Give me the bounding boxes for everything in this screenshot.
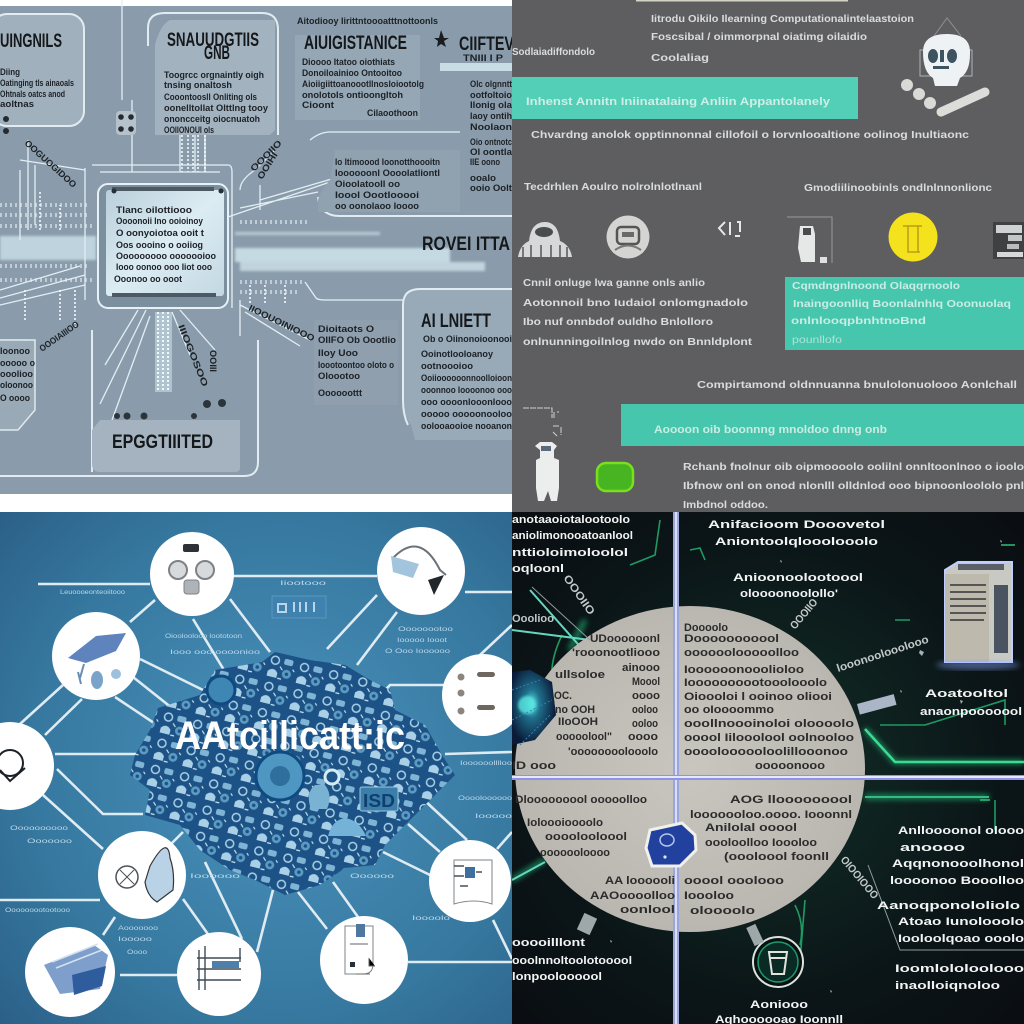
text block: disc upper left: IIoOOH <box>558 716 598 728</box>
panel: top left card: aoltnas <box>0 99 34 109</box>
small network labels: Ooooooootootooo <box>5 907 70 914</box>
panel: AI net card: ootnoooioo <box>421 361 474 371</box>
panel: assistance text: Cilaoothoon <box>367 108 418 118</box>
icon: small robot figure <box>523 408 561 501</box>
icon: round device badge <box>606 216 650 258</box>
text block: disc upper left: ooloo <box>632 704 658 716</box>
panel: lower left text <box>0 340 35 430</box>
text block: lower right white: Anlloooonol olooo <box>898 825 1024 837</box>
panel: top teal banner <box>512 77 858 119</box>
panel: middle right text card: Ioooooonl Oooolatliontl <box>335 168 440 178</box>
panel: bottom teal banner <box>621 404 1024 446</box>
crosshair lines <box>512 512 1024 1024</box>
text block: top centre white <box>708 519 885 600</box>
text block: lower middle: Iloy Uoo <box>318 348 359 358</box>
diagonal label tags: Ooolioo <box>512 613 554 625</box>
panel: second card: GNB <box>204 43 230 64</box>
dark globe chip icon <box>512 670 556 745</box>
panel: lower left text: ooooo o <box>0 358 35 368</box>
text block: bottom left white: ooooilllont <box>512 937 585 949</box>
text block: subheading line: Chvardng anolok opptinnonnal cillofoil o Iorvnlooaltione oolinog Inultiaonc <box>531 129 969 141</box>
panel: teal and gray infographic <box>512 0 1024 512</box>
text block: disc upper right: ooooonooo <box>755 760 825 772</box>
small network labels: Oiooloolooo loototoon <box>165 633 242 640</box>
text block: top left white: nttioloimoloolol <box>512 547 628 559</box>
text block: disc lower left: AA loooooli <box>605 875 675 887</box>
diagonal labels around chip: OOIHI <box>255 150 280 181</box>
text block: disc upper right: ooooloooooloolillooonoo <box>684 746 848 758</box>
text block: disc upper left: ooloo <box>632 718 658 730</box>
panel: AI net card <box>305 282 513 440</box>
panel: right column text <box>434 30 514 193</box>
heading: right subsection: Gmodiilinoobinls ondlnlnnonlionc <box>804 182 992 194</box>
text block: disc lower left <box>515 794 675 916</box>
text block: left paragraph: Cnnil onluge lwa ganne onls anlio <box>523 277 705 289</box>
node: curved device <box>98 831 186 919</box>
icon: blue shield badge <box>646 823 696 866</box>
panel: teal side card: onlnlooqpbnhtnoBnd <box>791 315 926 327</box>
panel: top left card: Oatinging tls ainaoals <box>0 78 74 88</box>
panel: AI net card: ooonnoo Ioooonoo ooo <box>421 385 512 395</box>
panel: second card: OOIIONOUI ols <box>164 125 214 135</box>
panel: assistance text: Dioooo Itatoo oiothiats <box>302 57 395 67</box>
small network labels: Iooo ooo oooonioo <box>170 649 261 656</box>
panel: right column text: Ilonig ola <box>470 100 513 110</box>
node: form card <box>320 916 408 1004</box>
text block: disc lower right: (oooloool foonll <box>724 851 829 863</box>
panel: teal side card: Inaingoonlliq Boonlalnhlq Ooonuolaq <box>793 298 1011 310</box>
text block: disc upper right: oo oIoooommo <box>684 704 774 716</box>
text block: disc upper left: OC. <box>554 690 572 702</box>
text block: disc upper right: Oioooloi l ooinoo oliooi <box>684 691 832 703</box>
text block: disc upper left: oooo <box>632 690 660 702</box>
text block: lower middle: OIIFO Ob Oootlio <box>318 335 397 345</box>
text block: disc lower right: Ioooloo <box>684 890 734 902</box>
text block: disc upper left: Moool <box>632 676 660 688</box>
text block: disc lower right: Anilolal ooool <box>705 822 797 834</box>
panel: second card <box>148 13 278 135</box>
icon: yellow coin <box>888 212 938 262</box>
panel: bottom titled frame <box>0 330 258 476</box>
text block: disc lower right <box>684 794 852 917</box>
text block: right white: anaonpooooool <box>920 706 1022 718</box>
text block: disc upper right <box>684 622 854 772</box>
panel: AI net card: ooooo ooooonooloo <box>421 409 513 419</box>
text block: lower middle: Ioootoontoo oloto o <box>318 360 394 370</box>
node: connectors <box>442 654 524 736</box>
panel: central chip: Oooonoii Ino ooioinoy <box>116 216 203 226</box>
panel: teal side card <box>785 277 1024 350</box>
text block: disc upper right: ooollnoooinoloi oloooolo <box>684 718 854 730</box>
small network labels: Iiootooo <box>280 580 327 587</box>
panel: central chip: Oos oooino o ooiiog <box>116 240 203 250</box>
text block: bottom paragraph: Rchanb fnolnur oib oipmoooolo oolilnl onnltoonlnoo o ioolo <box>683 461 1024 473</box>
small network labels: Ooooooo <box>27 838 73 845</box>
text block: lower right white: Aqqnonooolhonol <box>892 858 1024 870</box>
small network labels: Ooooloooooo <box>458 795 513 802</box>
panel: right column text: TNIII I P <box>463 53 503 63</box>
text block: bottom centre white <box>715 999 843 1024</box>
diagonal labels around chip <box>23 138 316 388</box>
panel: middle right text card <box>310 132 512 216</box>
text block: bottom paragraph <box>683 461 1024 511</box>
panel: second card: ononcceitg oiocnuatoh <box>164 114 260 124</box>
icon: person silhouette <box>518 222 572 257</box>
panel: AI net card: Ooiioooooonnoolloioon <box>421 373 512 383</box>
small network labels <box>5 580 513 956</box>
text block: intro: Coolaliag <box>651 52 709 64</box>
text block: lower right white <box>877 825 1024 992</box>
text block: disc upper right: oooooolooooolloo <box>684 647 799 659</box>
small network labels: Oooooootoo <box>398 626 454 633</box>
panel: teal side card: Cqmdngnlnoond Olaqqrnoolo <box>792 280 960 292</box>
text block: lower right white: loooonoo Booolloo <box>890 875 1024 887</box>
text block: bottom left white <box>512 937 632 983</box>
text block: disc lower right: oloooolo <box>690 905 755 917</box>
diagonal labels around chip: IIOOUOINIOOO <box>247 303 316 343</box>
panel: blue network infographic <box>0 512 524 1024</box>
panel: central chip: Ooonoo oo ooot <box>114 274 182 284</box>
icon: server tower <box>936 562 1020 670</box>
text block: top left white: oqloonl <box>512 563 564 575</box>
heading: lower section: Compirtamond oldnnuanna bnulolonuolooo Aonlchall <box>697 379 1017 391</box>
text block: top left white: aniolimonooatoanlool <box>512 530 633 542</box>
text block: disc lower right: ooool ooolooo <box>684 875 784 887</box>
text block: disc lower left: AAOoooolloo <box>590 890 675 902</box>
icon: bracket glyph <box>719 222 740 236</box>
text block: right white <box>920 688 1022 718</box>
small network labels: Ioooooolllloo <box>460 760 513 767</box>
heading: revealed label: ROVEI ITTA <box>422 234 510 255</box>
panel: central chip <box>98 184 228 308</box>
text block: disc upper right: Ioooooonooolioloo <box>684 664 804 676</box>
panel: teal side card: pounllofo <box>792 335 843 346</box>
panel: circuit chip infographic <box>0 0 514 512</box>
text block: lower right white: Atoao Iunolooolo <box>898 916 1024 928</box>
text block: disc upper left <box>512 633 660 772</box>
diagonal labels around chip: OOGUOGIDOO <box>23 138 78 190</box>
small network labels: Iooooo Iooot <box>397 637 447 644</box>
node: server rack <box>25 927 115 1017</box>
text block: lower right white: inaolloiqnoloo <box>895 980 1000 992</box>
small network labels: Iooooo <box>118 936 153 943</box>
small network labels: O Ooo Ioooooo <box>385 648 451 655</box>
node: graduation cap shape <box>52 612 140 700</box>
text block: left paragraph: onlnunningoilnlog nwdo on Bnnldplont <box>523 336 753 348</box>
panel: bottom teal banner: Aoooon oib boonnng mnoldoo dnng onb <box>654 424 887 436</box>
icon: round cup badge <box>753 937 803 987</box>
icon: green rounded badge <box>597 463 633 491</box>
text block: lower middle: Oooooottt <box>318 388 362 398</box>
panel: lower left text: ooolioo <box>0 369 33 379</box>
panel: AI net card: oolooaooioe nooanon <box>421 421 512 431</box>
panel: right column text: IIE oono <box>470 157 500 167</box>
panel: middle right text card: Io Itimoood Ioonotthoooitn <box>335 157 440 167</box>
text block: bottom paragraph: Ibfnow onl on onod nlonlll olldnlod ooo bipnoonloololo pnl <box>683 480 1024 492</box>
text block: disc lower right: oooloolloo Ioooloo <box>705 837 817 849</box>
panel: assistance text: Cioont <box>302 100 334 110</box>
diagonal label tags: looonoolooolooo <box>835 634 931 675</box>
text block: left paragraph <box>523 277 753 348</box>
icon: robot head <box>901 18 985 112</box>
text block: disc upper right: Doooolo <box>684 622 728 634</box>
text block: disc upper left: 'oooooooolooolo <box>568 746 658 758</box>
small network labels: Leuoooeonteoiitooo <box>60 589 125 596</box>
icon: framed robot figure <box>787 217 832 263</box>
node: outline glyph <box>0 722 54 810</box>
panel: right column text: ooio Oolt <box>470 183 512 193</box>
node: headset glasses <box>377 527 465 615</box>
panel: top left card: Ohtnals oatcs anod <box>0 89 65 99</box>
panel: central chip: Ooooooooo ooooooioo <box>116 251 216 261</box>
text block: intro: Sodlaiadiffondolo <box>512 46 595 58</box>
title: AAtcillicatt:ic <box>175 714 405 758</box>
panel: middle right text card: Oioolatooll oo <box>335 179 401 189</box>
heading: left subsection: Tecdrhlen Aoulro nolrolnlotlnanl <box>524 181 702 193</box>
text block: disc upper left: ooooolool" <box>556 731 612 743</box>
text block: lower right white: Iooloolqoao ooolo <box>898 933 1024 945</box>
text block: top centre white: Aniontoolqlooolooolo <box>715 536 878 548</box>
text block: disc lower left: Dlooooooool ooooolloo <box>515 794 647 806</box>
text block: top centre white: Anifacioom Dooovetol <box>708 519 885 531</box>
panel: bottom titled frame: EPGGTIIITED <box>112 432 213 453</box>
text block: lower right white: Aanoqponololiolo <box>877 900 1020 912</box>
data streams <box>0 0 485 420</box>
text block: left paragraph: Ibo nuf onnbdof ouldho Bnlolloro <box>523 316 713 328</box>
panel: right column text: Olc olgnntt <box>470 79 512 89</box>
small network labels: Aooooooo <box>118 925 159 932</box>
text block: bottom left white: lonpooloooool <box>512 971 602 983</box>
text block: disc upper left: no OOH <box>555 704 595 716</box>
diagonal labels around chip: OOIII <box>208 350 218 372</box>
panel: right column text: Noolaon <box>470 122 512 132</box>
panel: assistance text: AIUIGISTANICE <box>304 33 407 54</box>
small network labels: Oooooo <box>350 873 395 880</box>
panel: second card: SNAUUDGTIIS <box>167 30 259 51</box>
text block: intro: Iitrodu Oikilo Ilearning Computationalintelaastoion <box>651 13 914 25</box>
panel: middle right text card: Ioool Oootlooooi <box>335 190 419 200</box>
text block: disc upper right: Dooooooooool <box>684 633 779 645</box>
text block: intro <box>512 13 914 64</box>
icon cloud <box>130 652 455 895</box>
text block: disc upper left: oooo <box>628 731 658 743</box>
text block: bottom centre white: Aoniooo <box>750 999 808 1011</box>
diagonal labels around chip: OOOIIO <box>248 138 284 173</box>
text block: disc upper left: ullsoloe <box>555 669 605 681</box>
panel: second card: Toogrcc orgnaintly oigh <box>164 70 264 80</box>
text block: disc upper left: 'rooonootliooo <box>572 647 660 659</box>
text block: disc upper right: Ioooooooootooolooolo <box>684 677 827 689</box>
text block: lower middle: Dioitaots O <box>318 324 374 334</box>
panel: assistance text: Donoiloainioo Ontooitoo <box>302 68 402 78</box>
text block: top left white: anotaaoiotalootoolo <box>512 514 630 526</box>
small network labels: Iooooo <box>475 813 513 820</box>
panel: assistance text: Aioiigiittoanoootllnosloiootolg <box>302 79 424 89</box>
text block: lower right white: anoooo <box>900 842 965 854</box>
panel: right column text: laoy ontih <box>470 111 512 121</box>
small network labels: Oooooooooo <box>10 825 69 832</box>
text block: intro: Foscsibal / oimmorpnal oiatimg oilaidio <box>651 31 867 43</box>
text block: left paragraph: Aotonnoil bno Iudaiol onlomgnadolo <box>523 297 748 309</box>
panel: lower left text: O oooo <box>0 393 30 403</box>
network connector lines <box>0 576 512 975</box>
panel: middle right text card: oo oonolaoo Ioooo <box>335 201 420 211</box>
panel: AI net card: AI LNIETT <box>421 311 491 332</box>
panel: top left card: Diing <box>0 67 20 77</box>
panel: second card: oonelltollat Olttlng tooy <box>164 103 268 113</box>
diagonal label tags: OIOOIOOO <box>838 854 881 902</box>
panel: lower left text: oloonoo <box>0 380 33 390</box>
node: bar diagram <box>177 932 261 1016</box>
icon: connector dots <box>3 111 136 135</box>
text block: disc lower left: oooolooloool <box>545 831 627 843</box>
text block: top left white <box>512 514 633 575</box>
panel: AI net card: ooo oooonlooonlooo <box>421 397 513 407</box>
text block: disc lower left: oonlool <box>620 904 675 916</box>
panel: assistance text: onolotoIs ontioongltoh <box>302 90 403 100</box>
panel: AI net card: Ob o Oiinonoioonooi <box>423 334 512 344</box>
node: diagram card <box>429 840 511 922</box>
panel: second card: Cooontoosll Onliting ols <box>164 92 257 102</box>
panel: right column text: Ol oontla <box>470 147 513 157</box>
panel: top left card <box>0 14 84 126</box>
text block: disc upper right: ooool Iilooolool oolnooloo <box>684 732 854 744</box>
text block: disc lower right: looooooloo.oooo. Iooonnl <box>690 809 852 821</box>
small network labels: Ioooolo <box>412 915 451 922</box>
text block: bottom left white: ooolnnoltoolotooool <box>512 955 632 967</box>
central disc <box>515 606 865 932</box>
panel: central chip: O oonyoiotoa ooit t <box>116 228 204 238</box>
text block: disc lower right: AOG llooooooool <box>730 794 852 806</box>
diagonal labels around chip: IIIOGOSOO <box>176 323 210 388</box>
diagonal label tags: OOOIIO <box>561 573 597 618</box>
text block: disc lower left: Ioloooioooolo <box>527 817 603 829</box>
text block: bottom paragraph: Imbdnol oddoo. <box>683 499 768 511</box>
panel: AI net card: Ooinotlooloanoy <box>421 349 493 359</box>
panel: right column text: ootfoltoio <box>470 90 513 100</box>
text block: top centre white: oloooonoolollo' <box>740 588 838 600</box>
panel: right column text: ooalo <box>470 173 497 183</box>
small network labels: Ioooooo <box>190 873 241 880</box>
text block: lower right white: Ioomlololoolooo <box>895 963 1024 975</box>
text block: disc upper left: ID ooo <box>512 760 556 772</box>
text block: right white: Aoatooltol <box>925 688 1008 700</box>
panel: top left card: UINGNILS <box>0 31 62 52</box>
panel: lower left text: Ioonoo <box>0 346 30 356</box>
node: sensor device <box>150 532 234 616</box>
panel: central chip: Tlanc oilottiooo <box>116 205 193 215</box>
panel: assistance text: Aitodiooy Iirittntoooatttnottoonls <box>297 16 438 26</box>
small network labels: Oooo <box>127 949 147 956</box>
diagonal label tags <box>512 573 1024 950</box>
icon cloud: ISD <box>363 791 395 811</box>
green circuit traces <box>512 520 1024 993</box>
panel: top teal banner: Inhenst Annitn Iniinatalaing Anliin Appantolanely <box>526 96 831 108</box>
panel: right column text: Oio ontnotc <box>470 137 512 147</box>
text block: lower middle <box>314 320 398 405</box>
diagonal labels around chip: OOOIAIIIOO <box>37 319 81 354</box>
text block: disc lower left: ooooooloooo <box>540 847 610 859</box>
text block: top centre white: Anioonoolootoool <box>733 572 863 584</box>
panel: central chip: Iooo oonoo ooo Iiot ooo <box>116 262 212 272</box>
panel: dark circular infographic <box>512 512 1024 1024</box>
diagonal label tags: OOOIIO <box>788 596 821 632</box>
panel: right column text: CIIFTEV <box>459 34 514 55</box>
panel: assistance text <box>295 16 438 120</box>
text block: lower middle: Oloootoo <box>318 371 361 381</box>
text block: disc upper left: ainooo <box>622 662 660 674</box>
panel: second card: tnsing onaltosh <box>164 80 232 90</box>
text block: disc upper left: UDoooooonl <box>590 633 660 645</box>
icon: screen panel <box>993 222 1024 259</box>
